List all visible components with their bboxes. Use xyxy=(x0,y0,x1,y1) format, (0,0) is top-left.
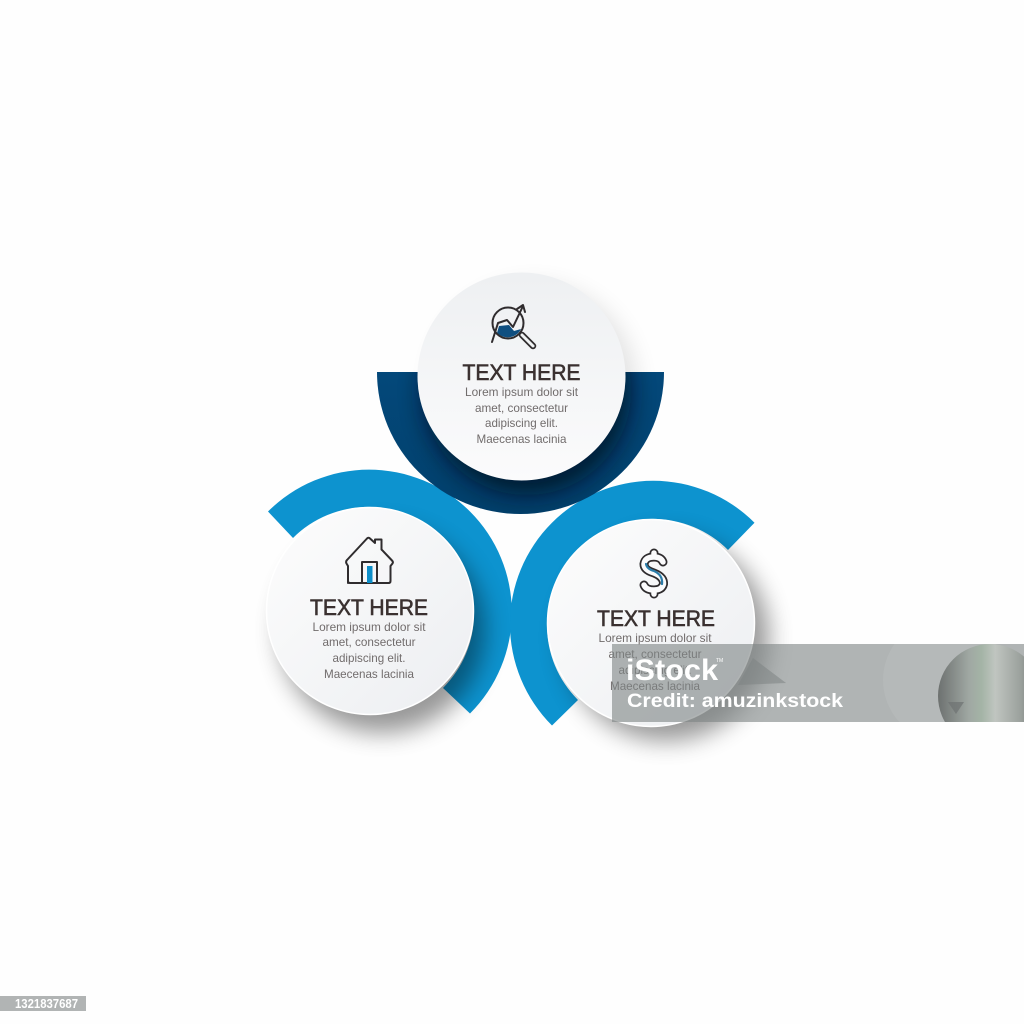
left body text: adipiscing elit. xyxy=(332,651,406,665)
panel: left ring and circle xyxy=(266,470,512,733)
right body text: adipiscing elit. xyxy=(618,663,692,677)
left circle shadow xyxy=(279,527,485,733)
watermark credit: Credit: amuzinkstock xyxy=(627,691,843,712)
left heading: TEXT HERE xyxy=(310,595,428,620)
top ring shadow xyxy=(408,372,646,509)
right body text: Lorem ipsum dolor sit xyxy=(598,631,712,645)
left body text: Maecenas lacinia xyxy=(324,667,414,681)
top body text xyxy=(465,385,579,446)
icon: dollar sign xyxy=(644,553,664,594)
right body text: Maecenas lacinia xyxy=(610,679,700,693)
watermark decorative orb xyxy=(883,618,1007,742)
right body text xyxy=(598,631,712,693)
panel: top half ring and circle xyxy=(377,272,664,514)
panel: right ring and circle xyxy=(510,481,769,741)
top circle soft shadow xyxy=(432,284,636,488)
right circle xyxy=(548,520,754,726)
left body text: amet, consectetur xyxy=(322,635,416,649)
watermark logo: iStock xyxy=(626,654,718,687)
top navy half ring xyxy=(377,372,664,514)
top circle xyxy=(418,272,626,480)
top body text: Maecenas lacinia xyxy=(476,432,567,446)
image id tag: 1321837687 xyxy=(15,997,78,1011)
right heading: TEXT HERE xyxy=(597,606,715,631)
left body text: Lorem ipsum dolor sit xyxy=(312,620,426,634)
left blue ring xyxy=(268,470,512,714)
icon: house xyxy=(346,538,393,583)
right body text: amet, consectetur xyxy=(608,647,702,661)
left body text xyxy=(312,620,426,681)
watermark band xyxy=(612,644,1024,722)
right blue ring xyxy=(510,481,754,726)
top heading: TEXT HERE xyxy=(462,360,580,385)
right circle shadow xyxy=(563,535,769,741)
top body text: amet, consectetur xyxy=(475,401,568,415)
top body text: adipiscing elit. xyxy=(485,416,558,430)
top body text: Lorem ipsum dolor sit xyxy=(465,385,579,399)
watermark trademark: TM xyxy=(716,658,723,664)
left circle xyxy=(266,508,474,714)
icon: magnifier with chart xyxy=(492,305,533,346)
